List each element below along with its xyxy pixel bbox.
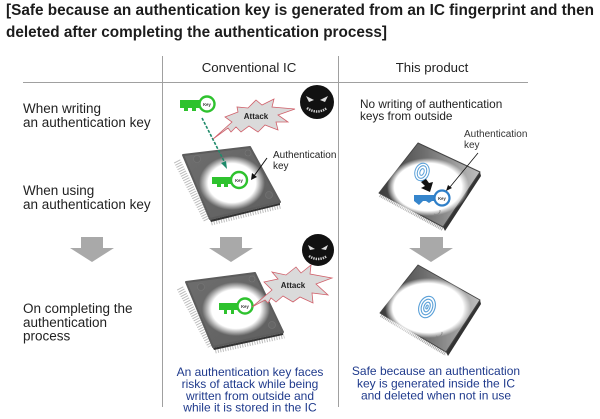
title: deleted after completing the authentication process] <box>6 24 387 41</box>
label: authentication key product: Authentication <box>464 129 527 140</box>
title: [Safe because an authentication key is generated from an IC fingerprint and then <box>6 2 594 19</box>
arrow: product column down <box>409 237 453 262</box>
label: authentication key product: key <box>464 140 480 151</box>
attack burst top: Attack <box>244 112 269 121</box>
arrow: fingerprint to key <box>421 179 433 192</box>
label: authentication key conventional: key <box>273 161 289 172</box>
caption: product safe: key is generated inside the IC <box>357 376 515 390</box>
chip: conventional writing <box>177 147 281 222</box>
column heading: This product: This product <box>396 60 469 75</box>
caption: conventional risk: An authentication key faces <box>177 365 323 379</box>
icon: evil face top <box>300 85 334 119</box>
caption: product safe: and deleted when not in use <box>361 388 511 402</box>
column heading: Conventional IC: Conventional IC <box>202 60 297 75</box>
row label: when writing: When writing <box>23 101 101 116</box>
table grid lines <box>23 56 528 407</box>
attack burst bottom <box>252 265 332 307</box>
caption: conventional risk: written from outside and <box>185 389 314 403</box>
icon: green key in chip: Key <box>235 178 244 183</box>
icon: fingerprint <box>412 161 432 183</box>
attack burst top <box>213 99 295 139</box>
icon: green key stored: Key <box>241 304 250 309</box>
arrow: black pointer to key <box>251 158 267 180</box>
icon: green key outside <box>180 96 214 112</box>
row label: on completing: authentication <box>23 315 107 330</box>
icon: fingerprint completed <box>416 294 438 320</box>
text: no writing from outside: No writing of authentication <box>360 97 502 111</box>
arrow: left column down <box>70 237 114 262</box>
attack burst bottom: Attack <box>281 281 306 290</box>
row label: when writing: an authentication key <box>23 115 151 130</box>
title <box>6 2 594 41</box>
row label: when using: an authentication key <box>23 197 151 212</box>
arrow: pointer to blue key <box>446 153 478 191</box>
text: no writing from outside: keys from outside <box>360 109 453 123</box>
arrow: dashed green writing path <box>202 118 227 169</box>
icon: green key outside: Key <box>203 102 212 107</box>
row label: on completing: process <box>23 328 71 344</box>
row label: when using: When using <box>23 183 94 198</box>
chip: product completed <box>380 265 481 356</box>
chip: product in use <box>379 143 481 231</box>
icon: evil face bottom <box>302 234 334 266</box>
chip: conventional completion <box>180 273 284 350</box>
row label: on completing: On completing the <box>23 301 133 316</box>
arrow: conventional column down <box>209 237 253 262</box>
caption: conventional risk: risks of attack while being <box>182 377 318 391</box>
caption: conventional risk: while it is stored in the IC <box>182 400 317 414</box>
label: authentication key conventional: Authentication <box>273 150 336 161</box>
caption: product safe: Safe because an authentication <box>352 364 520 378</box>
icon: blue key: Key <box>438 196 447 201</box>
